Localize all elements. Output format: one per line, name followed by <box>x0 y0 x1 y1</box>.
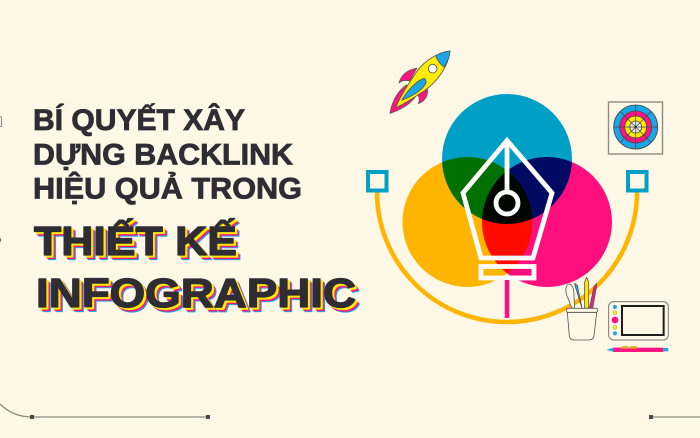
overlapping CMY circles <box>402 94 612 287</box>
icon: stylus pen <box>607 346 668 352</box>
heading: INFOGRAPHIC with offset colour layers: INFOGRAPHIC <box>40 274 360 320</box>
heading: THIẾT KẾ with offset colour layers: THIẾT KẾ <box>36 220 239 266</box>
heading: intro lines: DỰNG BACKLINK <box>33 138 293 172</box>
heading: THIẾT KẾ with offset colour layers: THIẾT KẾ <box>34 218 237 264</box>
heading: INFOGRAPHIC with offset colour layers: INFOGRAPHIC <box>38 272 358 318</box>
icon: pen nib <box>463 140 552 318</box>
icon: rocket <box>390 51 450 113</box>
heading: intro lines: HIỆU QUẢ TRONG <box>33 172 302 206</box>
heading: intro lines <box>33 103 302 206</box>
heading: THIẾT KẾ with offset colour layers: THIẾT KẾ <box>38 222 240 268</box>
heading: THIẾT KẾ with offset colour layers: THIẾT KẾ <box>38 222 242 268</box>
icon: right anchor square <box>628 172 646 190</box>
heading: INFOGRAPHIC with offset colour layers: INFOGRAPHIC <box>40 274 360 320</box>
decorative line: bottom right <box>649 415 700 419</box>
icon: drawing tablet <box>609 302 668 340</box>
icon: target in frame <box>608 102 662 154</box>
yellow arc connector <box>377 192 637 322</box>
decorative marker: left edge <box>0 117 2 242</box>
decorative line: bottom left <box>0 404 210 419</box>
icon: left anchor square <box>368 172 386 190</box>
icon: pencil cup <box>566 277 597 340</box>
heading: INFOGRAPHIC with offset colour layers: INFOGRAPHIC <box>36 270 356 316</box>
heading: intro lines: BÍ QUYẾT XÂY <box>33 103 245 137</box>
